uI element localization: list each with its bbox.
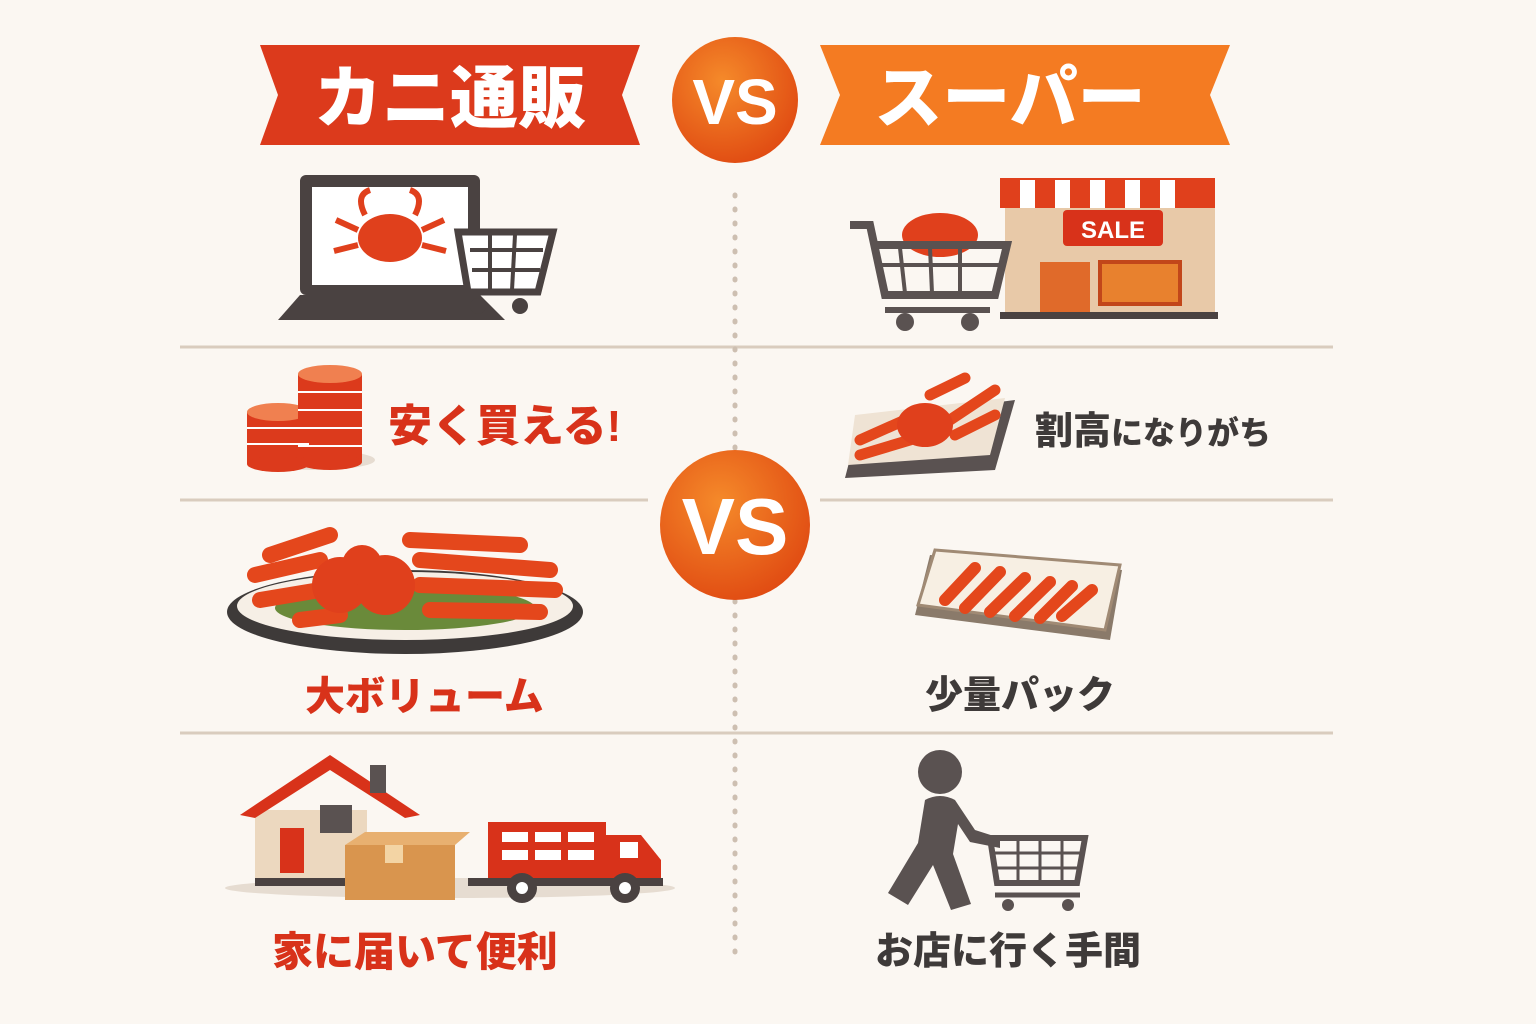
banner: スーパー: スーパー <box>874 61 1146 137</box>
text: 少量パック: 少量パック <box>925 675 1115 717</box>
banner: スーパー <box>820 45 1230 145</box>
icon: coins <box>247 365 375 472</box>
icon: house, box, truck <box>225 755 675 903</box>
VS badge top <box>672 37 798 163</box>
text: 安く買える: 安く買える! <box>388 402 621 451</box>
icon: crab on tray <box>845 378 1015 478</box>
banner: カニ通販 <box>260 45 640 145</box>
VS badge center: VS <box>682 482 788 571</box>
text: 大ボリューム: 大ボリューム <box>305 675 544 719</box>
icon: crab platter <box>227 535 583 654</box>
divider lines <box>180 195 1333 960</box>
icon: cart and store with SALE: SALE <box>1081 217 1145 244</box>
icon: small pack <box>915 550 1122 640</box>
banner: カニ通販: カニ通販 <box>314 61 586 137</box>
icon: laptop with crab and cart <box>278 175 553 320</box>
icon: person pushing cart <box>888 750 1085 911</box>
VS badge top: VS <box>692 66 778 138</box>
text: お店に行く手間: お店に行く手間 <box>875 931 1141 973</box>
VS badge center <box>660 450 810 600</box>
text: 家に届いて便利: 家に届いて便利 <box>272 929 558 975</box>
text: 割高になりがち: 割高になりがち <box>1035 411 1271 453</box>
icon: cart and store with SALE <box>850 178 1218 331</box>
